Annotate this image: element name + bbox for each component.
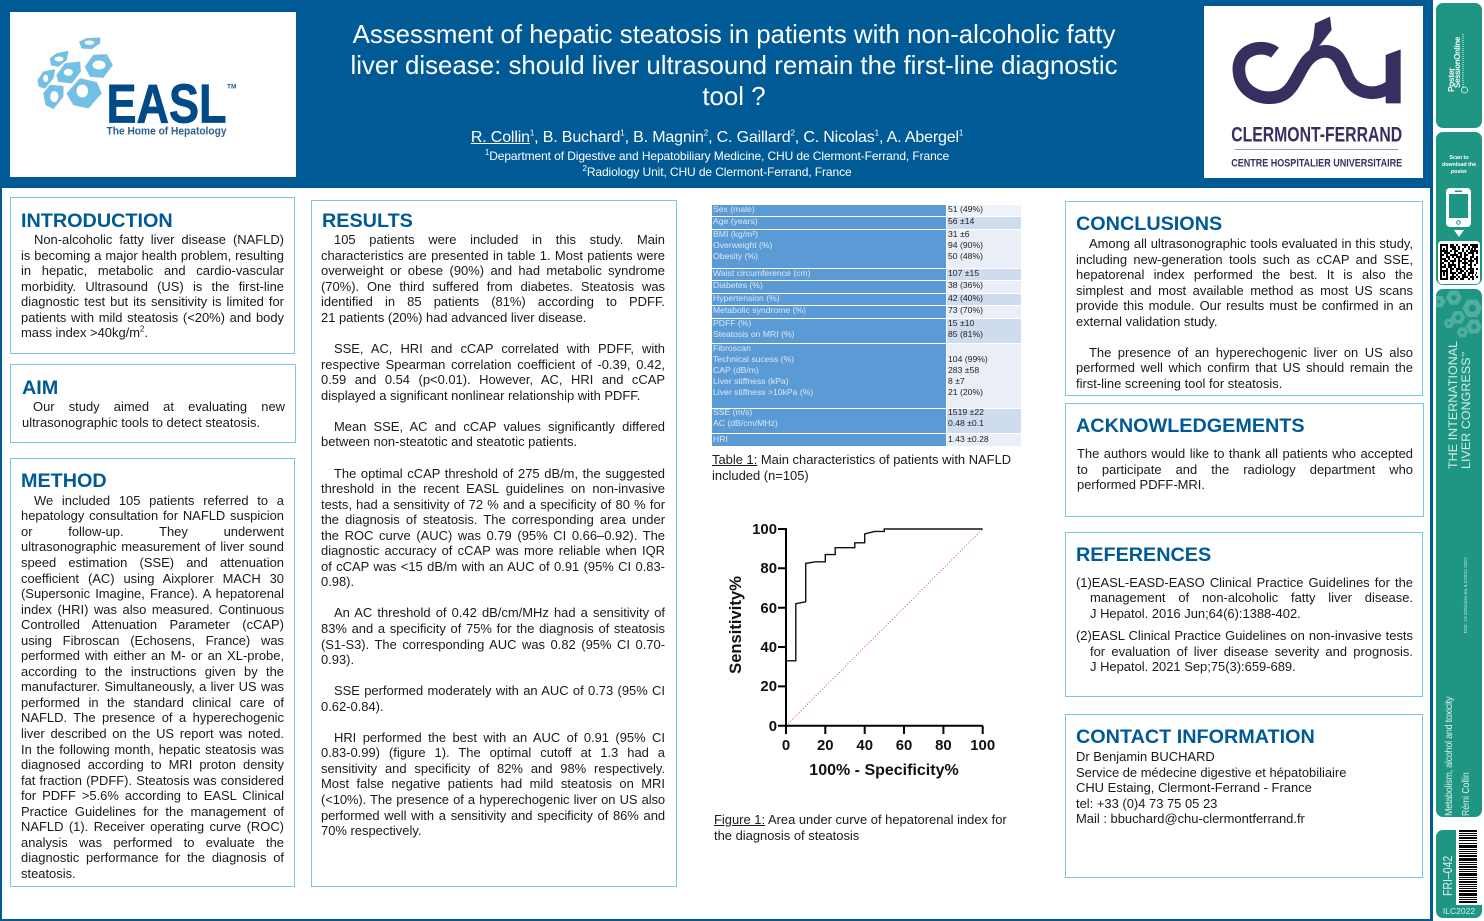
text: results: 0.59 and 0.54 (p<0.01). However, AC, HRI and cCAP: [321, 372, 665, 387]
text: results: HRI performed the best with an AUC of 0.91 (95% CI: [334, 730, 665, 745]
table: main characteristics: 8 ±7: [948, 376, 965, 386]
reference 2: J Hepatol. 2021 Sep;75(3):659-689.: [1090, 659, 1296, 674]
y tick labels: 0: [769, 719, 777, 735]
panel: acknowledgements: [1065, 403, 1424, 517]
y tick labels: [752, 522, 777, 735]
text: results: between non-steatotic and steatotic patients.: [321, 434, 577, 449]
text: method: according to the instructions given by the: [21, 664, 284, 679]
congress name: [1446, 341, 1472, 469]
text: acknowledgements: [1077, 446, 1413, 492]
text: results: displayed a significant nonlinear relationship with PDFF.: [321, 388, 640, 403]
title: liver disease: should liver ultrasound remain the first-line diagnostic: [350, 52, 1118, 80]
text: method: liver described on the US report was noted.: [21, 726, 284, 741]
text: introduction: diagnostic test but its sensitivity is limited for: [21, 294, 284, 309]
table: main characteristics: 51 (49%): [948, 204, 983, 214]
text: results: SSE performed moderately with an AUC of 0.73 (95% CI: [334, 683, 665, 698]
text: acknowledgements: to participate and the radiology department who: [1077, 462, 1413, 477]
header band: [0, 0, 1433, 188]
table: main characteristics: PDFF (%): [713, 318, 751, 328]
hexagon motif: [1436, 290, 1482, 338]
text: results: the ROC curve (AUC) was 0.79 (95% CI 0.66–0.92). The: [321, 528, 665, 543]
text: introduction: in hepatic, metabolic and cardio-vascular: [21, 263, 284, 278]
text: results: [321, 232, 665, 838]
text: conclusions: provide this module. Our results must be confirmed in an: [1076, 298, 1413, 313]
text: contact: Service de médecine digestive et hépatobiliaire: [1076, 765, 1346, 780]
text: method: diagnosed according to MRI proton density: [21, 757, 284, 772]
text: results: the diagnosis of steatosis. The corresponding area under: [321, 512, 665, 527]
title: tool ?: [702, 83, 766, 111]
table: main characteristics: Obesity (%): [713, 251, 758, 261]
x tick labels: 0: [782, 738, 790, 754]
text: contact: tel: +33 (0)4 73 75 05 23: [1076, 796, 1217, 811]
axes: [778, 528, 983, 734]
table: main characteristics: 73 (70%): [948, 305, 983, 315]
caption: figure 1: Figure 1: Area under curve of hepatorenal index for: [714, 812, 1007, 827]
text: results: (<10%). The presence of a hyperechogenic liver on US also: [321, 792, 665, 807]
table: main characteristics: 1519 ±22: [948, 407, 984, 417]
poster number: FRI–042: [1441, 856, 1455, 896]
text: conclusions: The presence of an hyperechogenic liver on US also: [1089, 345, 1413, 360]
text: results: 0.98).: [321, 574, 354, 589]
ILC2022 label: ILC2022: [1443, 906, 1475, 916]
logo: EASL: TM: [227, 84, 236, 90]
panel: contact information: [1065, 714, 1423, 878]
congress name: THE INTERNATIONAL: [1446, 341, 1460, 469]
logo: CHU Clermont-Ferrand: [1204, 6, 1423, 178]
x axis title: 100% - Specificity%: [809, 762, 959, 779]
ROC curve: [786, 529, 983, 661]
table: main characteristics: AC (dB/cm/MHz): [713, 418, 778, 428]
scan label: poster: [1451, 169, 1467, 175]
panel: method: [10, 458, 295, 887]
sidebar panel: QR download: [1436, 132, 1482, 285]
panel: conclusions: [1065, 201, 1423, 396]
text: conclusions: first-line screening tool for steatosis.: [1076, 376, 1282, 391]
affiliation 2: 2Radiology Unit, CHU de Clermont-Ferrand, France: [582, 164, 852, 179]
author name: Rémi Collin: [1460, 772, 1472, 816]
table: main characteristics: Technical sucess (%): [713, 354, 794, 364]
table: main characteristics: SSE (m/s): [713, 407, 752, 417]
text: method: speed estimation (SSE) and attenuation: [21, 555, 284, 570]
caption: table 1: [712, 452, 1011, 483]
table: main characteristics: 283 ±58: [948, 365, 979, 375]
text: results: Most false negative patients had mild steatosis on MRI: [321, 776, 665, 791]
logo: EASL: The Home of Hepatology: [106, 125, 227, 137]
text: results: overweight or obese (90%) and had metabolic syndrome: [321, 263, 665, 278]
text: introduction: Non-alcoholic fatty liver disease (NAFLD): [34, 232, 284, 247]
y tick labels: 100: [752, 522, 777, 538]
sidebar panel: poster session online: [1436, 3, 1482, 128]
barcode box: [1456, 830, 1482, 905]
title: Assessment of hepatic steatosis in patients with non-alcoholic fatty: [353, 21, 1115, 49]
text: results: threshold in the recent EASL guidelines on non-invasive: [321, 481, 665, 496]
text: results: 0.93).: [321, 652, 354, 667]
text: method: Practice Guidelines for the management of: [21, 804, 284, 819]
reference 1: [1076, 574, 1413, 621]
text: aim: [22, 399, 285, 430]
text: introduction: patients with mild steatosis (<20%) and body: [21, 310, 284, 325]
text: method: ultrasonographic measurement of liver sound: [21, 539, 284, 554]
text: method: or follow-up. They underwent: [21, 524, 284, 539]
text: method: diagnostic performance for the diagnosis of: [21, 850, 284, 865]
text: results: 0.62-0.84).: [321, 699, 384, 714]
caption: table 1: Table 1: Main characteristics of patients with NAFLD: [712, 452, 1011, 467]
text: conclusions: [1076, 236, 1413, 391]
text: introduction: mass index >40kg/m2.: [21, 325, 148, 340]
text: results: characteristics are presented in table 1. Most patients were: [321, 248, 665, 263]
table: main characteristics: 38 (36%): [948, 280, 983, 290]
x tick labels: 40: [856, 738, 873, 754]
title: [350, 21, 1118, 111]
panel: results: [311, 200, 677, 887]
sidebar panel: congress: [1436, 289, 1482, 817]
caption: figure 1: the diagnosis of steatosis: [714, 828, 859, 843]
text: method: performed in the standard clinical care of: [21, 695, 284, 710]
text: results: diagnostic accuracy of cCAP was more reliable when IQR: [321, 543, 665, 558]
reference 1: management of non-alcoholic fatty liver disease.: [1090, 590, 1413, 605]
heading: contact information: CONTACT INFORMATION: [1076, 726, 1315, 748]
text: method: performed with either an M- or an XL-probe,: [21, 648, 284, 663]
text: contact: Dr Benjamin BUCHARD: [1076, 749, 1215, 764]
table: main characteristics: Steatosis on MRI (%): [713, 329, 794, 339]
text: method: manufacturer. Simultaneously, a liver US was: [21, 679, 284, 694]
text: aim: Our study aimed at evaluating new: [33, 399, 285, 414]
reference 2: [1076, 628, 1413, 674]
heading: references: REFERENCES: [1076, 544, 1211, 566]
text: method: analysis was performed to evaluate the: [21, 835, 284, 850]
sidebar panel: poster number: [1436, 830, 1482, 918]
table: main characteristics: 107 ±15: [948, 268, 979, 278]
text: method: using Fibroscan (Echosens, France) was: [21, 633, 284, 648]
text: results: sensitivity and specificity of 82% and 98% respectively.: [321, 761, 665, 776]
text: method: In the following month, hepatic steatosis was: [21, 742, 284, 757]
scan label: [1442, 155, 1476, 175]
text: method: Controlled Attenuation Parameter (cCAP): [21, 617, 284, 632]
x tick labels: 20: [817, 738, 834, 754]
table: main characteristics: Diabetes (%): [713, 280, 763, 290]
text: results: 83% and a specificity of 75% for the diagnosis of steatosis: [321, 621, 665, 636]
icon: phone: [1446, 188, 1471, 237]
logo: EASL: [10, 12, 296, 177]
text: conclusions: simplest and most available method as most US scans: [1076, 283, 1413, 298]
heading: conclusions: CONCLUSIONS: [1076, 213, 1222, 235]
DOI: DOI: 10.3252/pso.eu.ILC2022.2022: [1464, 557, 1469, 633]
caption: table 1: included (n=105): [712, 468, 809, 483]
text: results: performed well with a sensitivity and specificity of 86% and: [321, 808, 665, 823]
text: results: An AC threshold of 0.42 dB/cm/MHz had a sensitivity of: [334, 605, 665, 620]
table: main characteristics: Fibroscan: [713, 343, 751, 353]
reference 2: for evaluation of liver disease severity and prognosis.: [1090, 644, 1413, 659]
QR code: [1438, 241, 1480, 284]
table: main characteristics: 94 (90%): [948, 240, 983, 250]
table: main characteristics: 15 ±10: [948, 318, 974, 328]
table: main characteristics: Liver stiffness (kPa): [713, 376, 789, 386]
text: contact: [1076, 749, 1346, 826]
caption: figure 1: [714, 812, 1007, 843]
sidebar: [1436, 3, 1482, 918]
text: results: (70%). One third suffered from diabetes. Steatosis was: [321, 279, 665, 294]
text: method: fat fraction (PDFF). Steatosis was considered: [21, 773, 284, 788]
authors: R. Collin1, B. Buchard1, B. Magnin2, C. Gaillard2, C. Nicolas1, A. Abergel1: [471, 129, 963, 146]
y tick labels: 80: [760, 561, 777, 577]
table: main characteristics: 85 (81%): [948, 329, 983, 339]
text: introduction: [21, 232, 284, 340]
text: method: [21, 493, 284, 881]
text: results: 0.83-0.99) (figure 1). The optimal cutoff at 1.3 had a: [321, 745, 665, 760]
session topic: Metabolism, alcohol and toxicity: [1443, 697, 1455, 816]
text: conclusions: performed well which confirm that US should remain the: [1076, 360, 1413, 375]
x tick labels: 80: [935, 738, 952, 754]
text: results: Mean SSE, AC and cCAP values significantly differed: [334, 419, 665, 434]
heading: aim: AIM: [22, 377, 58, 399]
x tick labels: 60: [896, 738, 912, 754]
scan label: download the: [1442, 162, 1476, 168]
page frame: [0, 186, 1433, 921]
text: method: index (HRI) was also measured. Continuous: [21, 602, 284, 617]
table: main characteristics: Liver stiffness >10kPa (%): [713, 387, 813, 397]
text: conclusions: Among all ultrasonographic tools evaluated in this study,: [1089, 236, 1413, 251]
text: method: NAFLD (1). Receiver operating curve (ROC): [21, 819, 284, 834]
y tick labels: 40: [760, 640, 777, 656]
text: method: for PDFF >5.6% according to EASL Clinical: [21, 788, 284, 803]
scan label: Scan to: [1449, 155, 1469, 161]
table: main characteristics: [712, 204, 1021, 446]
reference 1: (1)EASL-EASD-EASO Clinical Practice Guidelines for the: [1076, 574, 1413, 590]
text: introduction: morbidity. Ultrasound (US) is the first-line: [21, 279, 284, 294]
chart: ROC curve: [726, 522, 995, 779]
brand dotted line: [1461, 34, 1468, 94]
text: conclusions: external validation study.: [1076, 314, 1217, 329]
panel: introduction: [10, 197, 295, 354]
text: results: (S1-S3). The corresponding AUC was 0.82 (95% CI 0.70-: [321, 637, 665, 652]
text: results: of cCAP was <15 dB/m with an AUC of 0.91 (95% CI 0.83-: [321, 559, 665, 574]
x tick labels: [782, 738, 995, 754]
text: contact: Mail : bbuchard@chu-clermontferrand.fr: [1076, 811, 1305, 826]
text: method: coefficient (AC) using Aixplorer MACH 30: [21, 571, 284, 586]
table: main characteristics: 42 (40%): [948, 293, 983, 303]
congress name: LIVER CONGRESS™: [1458, 351, 1472, 469]
heading: acknowledgements: ACKNOWLEDGEMENTS: [1076, 415, 1305, 437]
text: method: (Supersonic Imagine, France). A hepatorenal: [21, 586, 284, 601]
text: conclusions: hepatorenal index performed the best. It is also the: [1076, 267, 1413, 282]
table: main characteristics: 50 (48%): [948, 251, 983, 261]
text: introduction: is becoming a major health problem, resulting: [21, 248, 284, 263]
table: main characteristics: Age (years): [713, 216, 758, 226]
reference diagonal: [786, 529, 983, 726]
text: results: 21 patients (20%) had advanced liver disease.: [321, 310, 586, 325]
table: main characteristics: HRI: [713, 434, 728, 444]
text: acknowledgements: performed PDFF-MRI.: [1077, 477, 1205, 492]
table: main characteristics: Metabolic syndrome (%): [713, 305, 806, 315]
table: main characteristics: Hypertension (%): [713, 293, 780, 303]
brand text: SessionOnline: SessionOnline: [1453, 37, 1462, 88]
table: main characteristics: 0.48 ±0.1: [948, 418, 984, 428]
table: main characteristics: 31 ±6: [948, 229, 970, 239]
text: results: 70% respectively.: [321, 823, 421, 838]
text: results: respective Spearman correlation coefficient of -0.39, 0.42,: [321, 357, 665, 372]
text: results: The optimal cCAP threshold of 275 dB/m, the suggested: [334, 466, 665, 480]
text: method: hepatology consultation for NAFLD suspicion: [21, 508, 284, 523]
panel: references: [1065, 532, 1423, 697]
x tick labels: 100: [970, 738, 995, 754]
heading: results: RESULTS: [322, 210, 413, 232]
reference 1: J Hepatol. 2016 Jun;64(6):1388-402.: [1090, 606, 1301, 621]
table: main characteristics: BMI (kg/m²): [713, 229, 758, 239]
text: method: NAFLD. The presence of a hyperechogenic: [21, 710, 284, 725]
table: main characteristics: 1.43 ±0.28: [948, 434, 989, 444]
panel: aim: [10, 364, 296, 443]
affiliation 1: 1Department of Digestive and Hepatobiliary Medicine, CHU de Clermont-Ferrand, France: [485, 148, 949, 163]
text: acknowledgements: The authors would like to thank all patients who accepted: [1077, 446, 1413, 461]
y tick labels: 20: [760, 679, 777, 695]
logo: EASL: EASL: [106, 73, 226, 134]
table: main characteristics: Overweight (%): [713, 240, 772, 250]
table: main characteristics: Waist circumference (cm): [713, 268, 810, 278]
text: contact: CHU Estaing, Clermont-Ferrand - France: [1076, 780, 1312, 795]
y axis title: Sensitivity%: [726, 576, 745, 674]
text: aim: ultrasonographic tools to detect steatosis.: [22, 415, 260, 430]
text: results: identified in 85 patients (81%) according to PDFF.: [321, 294, 665, 309]
text: method: We included 105 patients referred to a: [34, 493, 284, 508]
text: results: SSE, AC, HRI and cCAP correlated with PDFF, with: [334, 341, 665, 356]
text: results: 105 patients were included in this study. Main: [334, 232, 665, 247]
table: main characteristics: 56 ±14: [948, 216, 974, 226]
heading: introduction: INTRODUCTION: [21, 210, 173, 232]
heading: method: METHOD: [21, 470, 107, 492]
text: results: tests, had a sensitivity of 72 % and a specificity of 80 % for: [321, 497, 665, 512]
text: method: steatosis.: [21, 866, 76, 881]
text: conclusions: including new-generation tools such as cCAP and SSE,: [1076, 252, 1413, 267]
y tick labels: 60: [760, 601, 777, 617]
table: main characteristics: 104 (99%): [948, 354, 988, 364]
brand text: Poster: Poster: [1446, 68, 1456, 92]
table: main characteristics: 21 (20%): [948, 387, 983, 397]
table: main characteristics: Sex (male): [713, 204, 755, 214]
reference 2: (2)EASL Clinical Practice Guidelines on non-invasive tests: [1076, 628, 1413, 643]
table: main characteristics: CAP (dB/m): [713, 365, 759, 375]
